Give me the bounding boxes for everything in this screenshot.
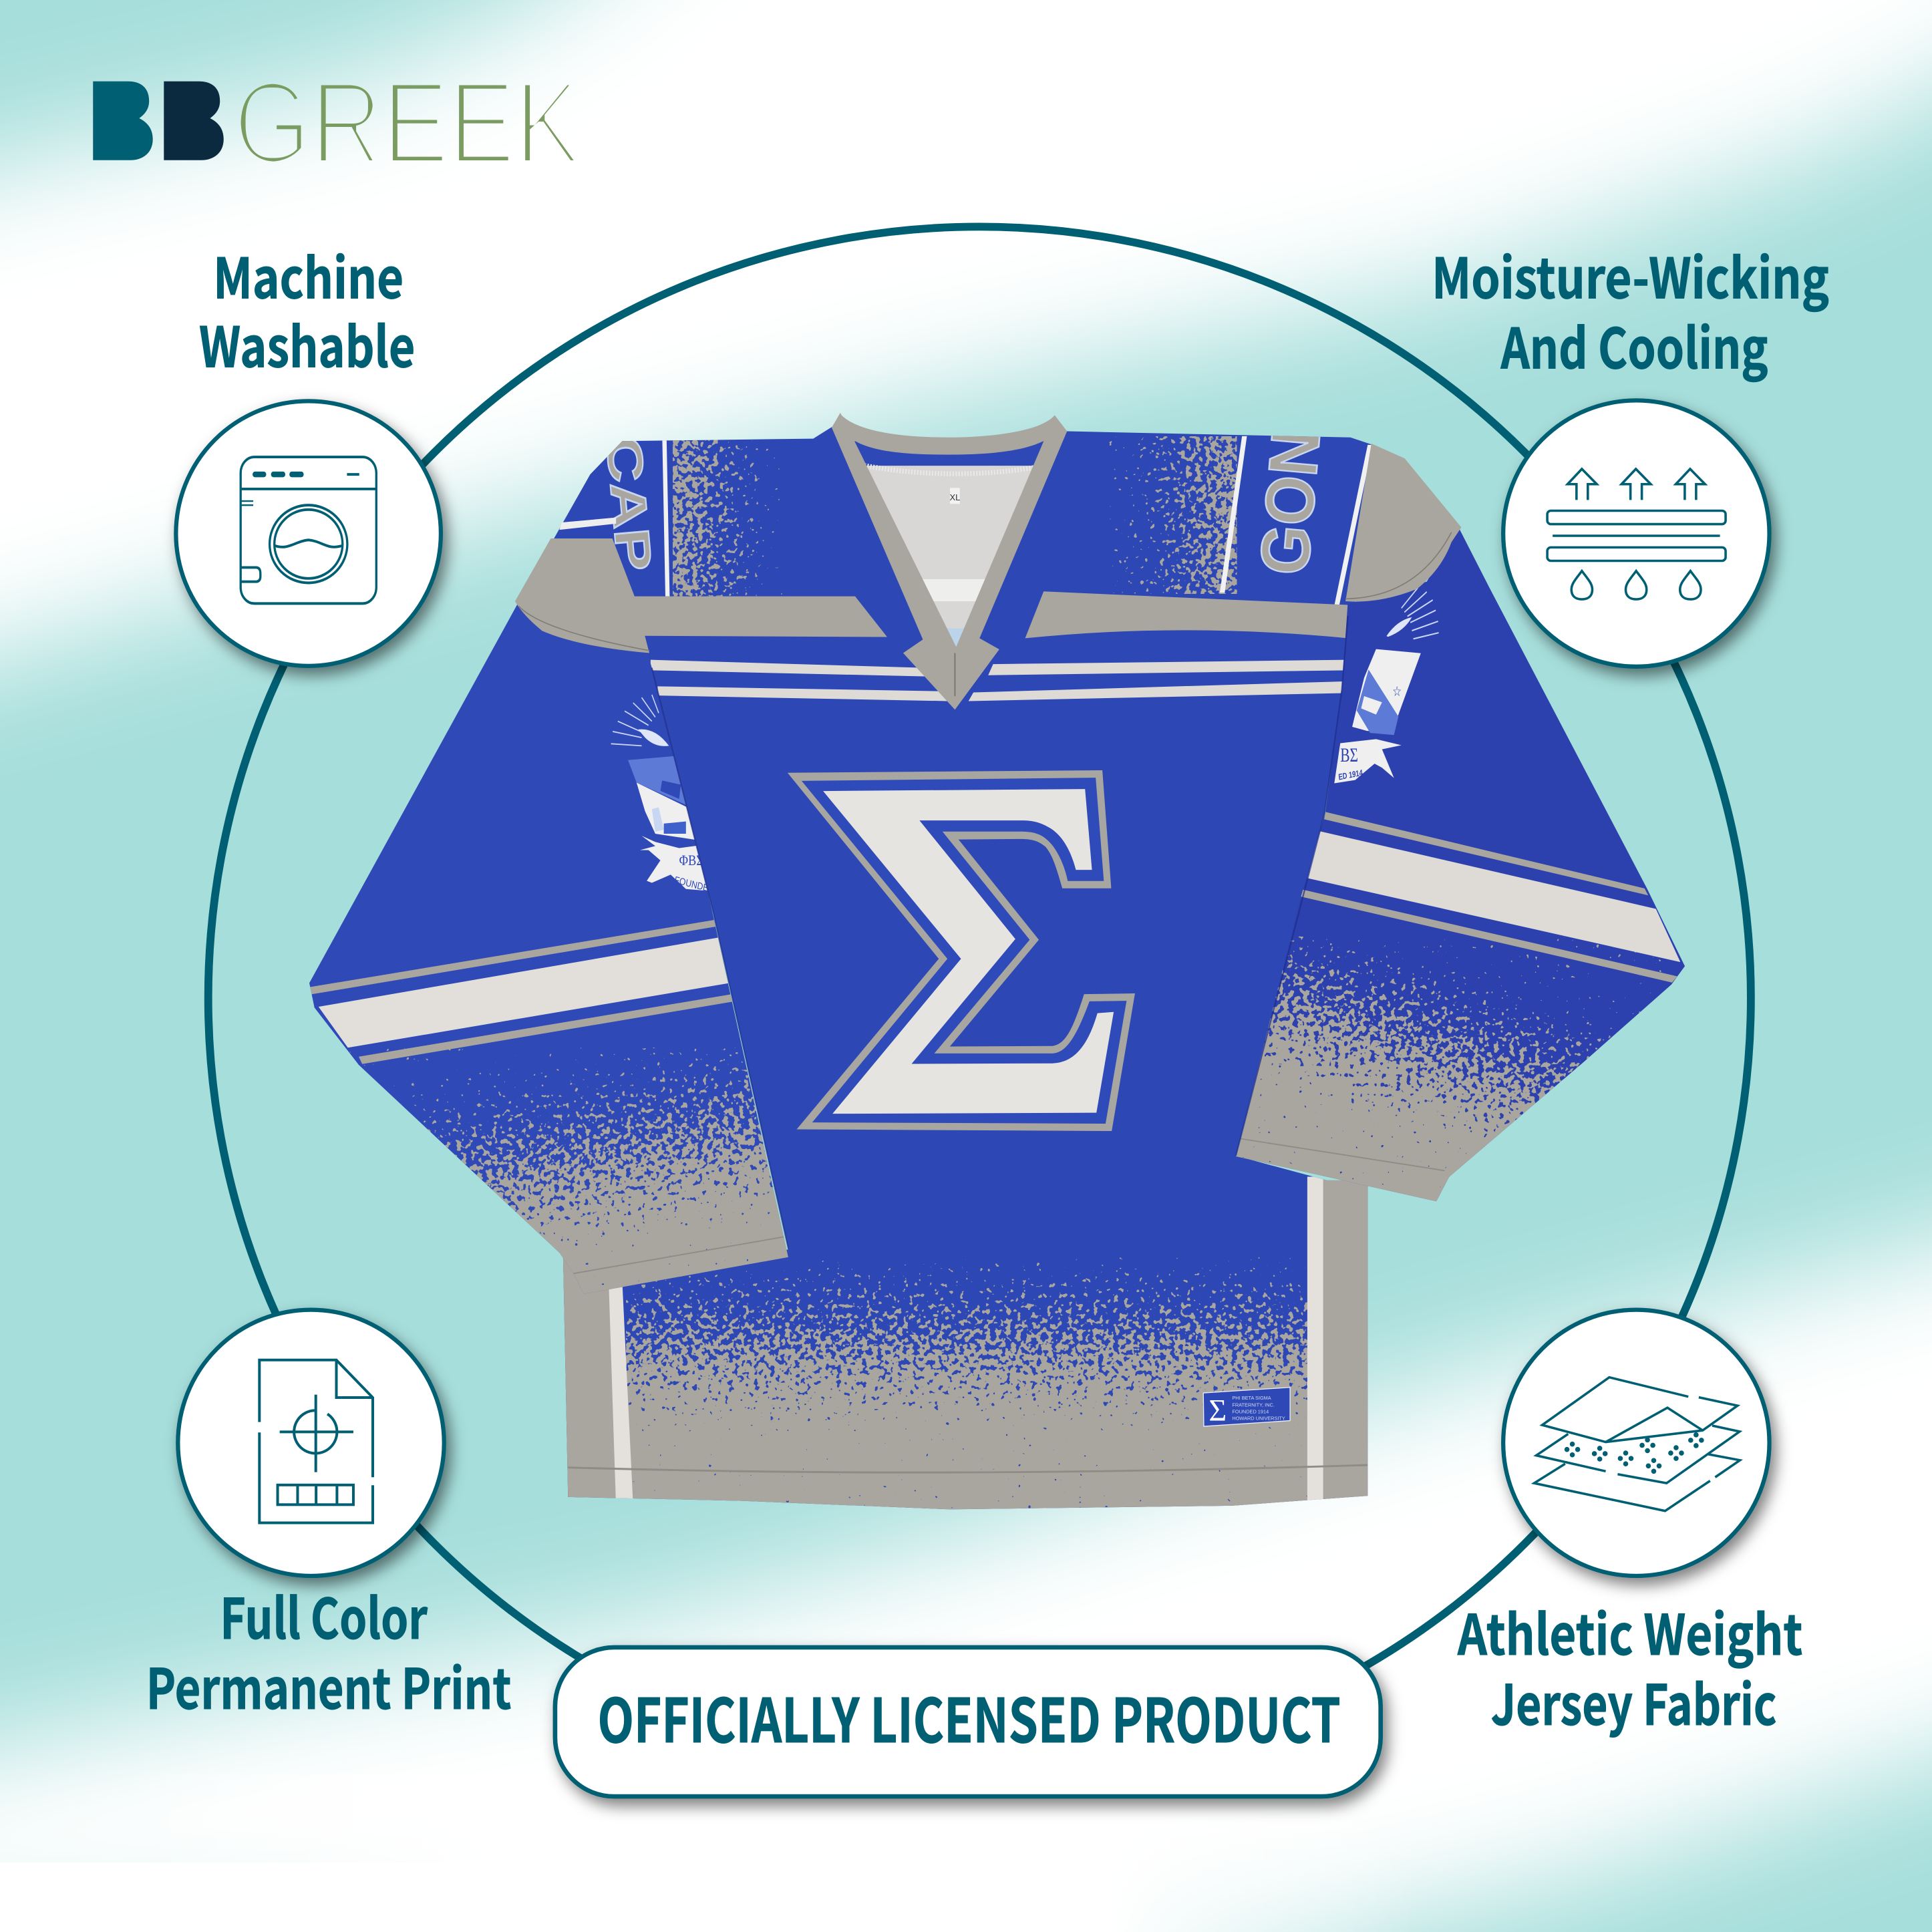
jersey body <box>554 426 1372 1510</box>
feature circle: full color print <box>178 1310 444 1576</box>
left sleeve stripes and crest <box>309 695 785 1273</box>
right sleeve stripes and crest: ED 1914 <box>1338 768 1363 782</box>
feature label: athletic weight: Jersey Fabric <box>1491 1661 1777 1741</box>
right shoulder yoke speckle <box>1109 436 1237 594</box>
large connecting ring <box>208 226 1751 1770</box>
jersey V-neck trim <box>832 413 1067 709</box>
feature label: moisture wicking: Moisture-Wicking <box>1432 234 1829 314</box>
chest white stripes <box>651 660 1348 701</box>
feature circle: machine washable <box>176 401 441 666</box>
icon: washing machine <box>240 457 376 603</box>
licensed product badge <box>555 1647 1381 1796</box>
licensed product badge: OFFICIALLY LICENSED PRODUCT <box>598 1673 1341 1760</box>
hem woven label: Σ <box>1209 1394 1227 1428</box>
right sleeve stripes and crest: ΒΣ <box>1340 744 1358 766</box>
yoke vertical stripes <box>662 436 1373 605</box>
grey yoke bands <box>635 591 1350 638</box>
hem woven label: HOWARD UNIVERSITY <box>1232 1416 1285 1422</box>
feature label: machine washable: Washable <box>199 303 415 383</box>
left sleeve stripes and crest: FOUNDED <box>673 874 715 895</box>
feature label: full color print: Permanent Print <box>146 1645 511 1725</box>
logo: BB GREEK <box>93 57 581 188</box>
hem woven label: FRATERNITY, INC. <box>1232 1402 1275 1408</box>
icon: layered fabric sheets <box>1534 1378 1740 1511</box>
feature label: moisture wicking: And Cooling <box>1500 304 1768 384</box>
left shoulder yoke speckle <box>673 439 784 597</box>
left sleeve stripes and crest: ΦΒΣ <box>679 853 703 869</box>
right sleeve stripes and crest <box>1236 588 1680 1170</box>
right sleeve stripes and crest: ☆ <box>1392 684 1402 700</box>
feature circle: athletic weight <box>1503 1310 1770 1576</box>
feature label: athletic weight <box>1457 1591 1802 1741</box>
icon: moisture arrows and fabric layers <box>1547 469 1726 599</box>
hem woven label <box>1203 1388 1290 1428</box>
yoke lettering right: GON <box>1245 426 1335 578</box>
jersey back collar and inner mesh: XL <box>950 492 960 502</box>
jersey left sleeve <box>296 591 813 1318</box>
feature label: machine washable <box>199 234 415 383</box>
jersey right sleeve <box>1232 518 1700 1220</box>
hem woven label: PHI BETA SIGMA <box>1232 1395 1271 1401</box>
jersey back collar and inner mesh <box>840 414 1055 655</box>
feature label: full color print <box>146 1575 511 1725</box>
hem woven label: FOUNDED 1914 <box>1232 1409 1269 1415</box>
feature label: machine washable: Machine <box>213 234 404 314</box>
yoke lettering left: CAP <box>595 434 663 573</box>
feature label: athletic weight: Athletic Weight <box>1457 1591 1802 1671</box>
jersey shoulder caps <box>515 444 1461 653</box>
feature label: moisture wicking <box>1432 234 1829 384</box>
chest sigma emblem <box>788 770 1135 1131</box>
logo: BB GREEK: GREEK <box>234 57 581 188</box>
feature circle: moisture wicking <box>1503 400 1770 667</box>
icon: print document with crosshair <box>259 1360 373 1523</box>
jersey photo illustration <box>296 413 1700 1516</box>
feature label: full color print: Full Color <box>220 1575 428 1655</box>
jersey sleeve seams <box>652 616 1348 1249</box>
